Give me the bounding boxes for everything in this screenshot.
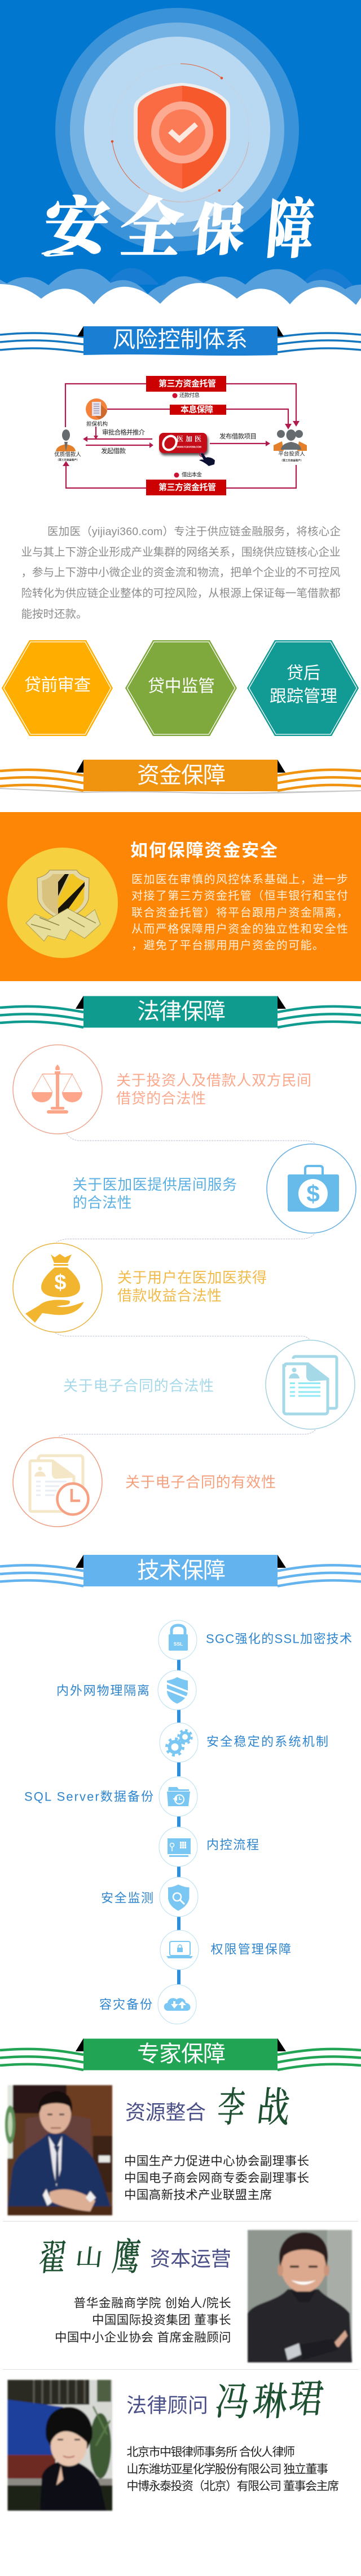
item: e-contract validity: 关于电子合同的有效性 — [125, 1474, 276, 1491]
icon: laptop lock — [166, 1941, 193, 1958]
investors — [274, 429, 307, 462]
heading: 法律保障 banner — [0, 996, 361, 1028]
logo: yijiayi — [159, 433, 208, 455]
timeline spine — [177, 1659, 180, 1984]
dashed connectors — [55, 1134, 315, 1436]
panel: pre-loan review hexagon: 贷前审查 — [24, 676, 91, 694]
text block: intro paragraph: 业与其上下游企业形成产业集群的网络关系，围绕供应链核心企业 — [21, 546, 341, 558]
item: user earnings legality: 关于用户在医加医获得 — [117, 1269, 267, 1286]
heading: 专家保障 banner — [0, 2038, 361, 2070]
name: 琳 — [251, 2381, 289, 2424]
chart: risk control flow diagram — [54, 376, 307, 495]
text block: intro paragraph: 医加医（yijiayi360.com）专注于供应链金融服务，将核心企 — [47, 525, 341, 538]
icon: documents — [284, 1356, 337, 1414]
logo: yijiayi: 医加医 — [177, 434, 201, 443]
photo: portrait — [5, 2085, 112, 2215]
item: SSL encryption — [159, 1620, 352, 1660]
title — [39, 193, 316, 266]
text block: 医加医在审慎的风控体系基础上，进一步 — [131, 873, 348, 886]
bio: 中博永泰投资（北京）有限公司 董事会主席 — [126, 2480, 339, 2493]
panel: in-loan supervision hexagon: 贷中监管 — [148, 677, 215, 695]
icon: lock: SSL — [174, 1641, 183, 1647]
title: 全 — [116, 193, 187, 265]
item: e-contract validity — [13, 1438, 276, 1527]
text block: intro paragraph — [21, 525, 341, 620]
bio: 普华金融商学院 创始人/院长 — [74, 2296, 231, 2310]
item: permissions — [160, 1930, 291, 1970]
icon: shield search — [168, 1885, 190, 1911]
item: network isolation: 内外网物理隔离 — [56, 1684, 149, 1697]
expert: Feng Linjun — [8, 2378, 339, 2511]
icon: briefcase — [288, 1166, 339, 1212]
arrow heads — [63, 421, 300, 466]
name: 山 — [74, 2245, 104, 2270]
item: user earnings legality — [13, 1243, 267, 1332]
name — [215, 2086, 292, 2131]
investors: 平台投资人 — [278, 451, 305, 458]
item: intermediary service legality — [73, 1144, 356, 1233]
panel: hero header — [0, 0, 361, 316]
title: 安 — [39, 193, 118, 261]
text block: intro paragraph: ，参与上下游中小微企业的资金流和物流，把单个企业的不可控风 — [21, 566, 341, 579]
text block: ，避免了平台挪用用户资金的可能。 — [131, 939, 324, 952]
panel: post-loan tracking hexagon: 贷后 — [287, 664, 320, 683]
item: intermediary service legality: 的合法性 — [73, 1194, 132, 1211]
item: internal control: 内控流程 — [206, 1838, 259, 1852]
icon: document with clock — [30, 1456, 88, 1515]
role: 法律顾问 — [126, 2394, 208, 2417]
photo: portrait — [248, 2230, 352, 2362]
icon: guarantee institution — [86, 398, 107, 420]
panel: post-loan tracking hexagon — [247, 640, 359, 736]
item: SSL encryption: SGC强化的SSL加密技术 — [206, 1632, 352, 1646]
photo: portrait — [8, 2380, 112, 2511]
icon: safe — [168, 1838, 191, 1857]
bio: 北京市中银律师事务所 合伙人律师 — [126, 2446, 295, 2459]
text block: intro paragraph: 能按时还款。 — [21, 608, 87, 620]
bio: 山东潍坊亚星化学股份有限公司 独立董事 — [126, 2463, 328, 2476]
text block: 对接了第三方资金托管（恒丰银行和宝付 — [131, 889, 348, 902]
icon: lock — [169, 1625, 188, 1651]
item: stable system — [160, 1723, 328, 1762]
clouds — [0, 268, 361, 316]
third-party custody box top: 第三方资金托管 — [159, 379, 216, 389]
role: 资本运营 — [150, 2247, 231, 2270]
panel: post-loan tracking hexagon: 跟踪管理 — [270, 688, 337, 706]
title: 障 — [263, 194, 316, 266]
panel: in-loan supervision hexagon — [125, 640, 237, 736]
heading: 专家保障 banner: 专家保障 — [137, 2042, 226, 2067]
icon: gears — [167, 1730, 192, 1755]
label: approval: 审批合格并推介 — [102, 428, 146, 436]
orbit arcs with dots — [111, 64, 249, 202]
label: initiate loan: 发起借款 — [101, 447, 126, 455]
item: SQL backup — [24, 1777, 197, 1816]
text block: 联合资金托管）将平台跟用户资金隔离， — [131, 906, 348, 919]
text block — [131, 873, 348, 952]
bio — [124, 2154, 309, 2202]
panel: pre-loan review hexagon — [2, 640, 113, 736]
name: 珺 — [287, 2378, 325, 2421]
name: 鹰 — [110, 2237, 143, 2278]
heading: 技术保障 banner: 技术保障 — [137, 1558, 226, 1583]
name — [213, 2378, 325, 2424]
bio: 中国中小企业协会 首席金融顾问 — [55, 2331, 231, 2344]
bio: 中国国际投资集团 董事长 — [92, 2313, 231, 2327]
item: intermediary service legality: 关于医加医提供居间服务 — [73, 1176, 237, 1193]
heading: 风险控制体系 banner: 风险控制体系 — [113, 327, 248, 352]
investors: （第三方资金账户） — [280, 459, 303, 462]
item: investor borrower legality: 关于投资人及借款人双方民间 — [116, 1072, 311, 1089]
bio: 中国高新技术产业联盟主席 — [124, 2188, 272, 2202]
title: 保 — [190, 199, 248, 261]
icon: briefcase: $ — [306, 1180, 320, 1207]
icon: orange shield with check — [134, 83, 230, 192]
label: lend principal — [174, 471, 202, 478]
icon: shield and money — [7, 848, 118, 958]
item: disaster backup — [99, 1985, 196, 2024]
name: 战 — [255, 2086, 292, 2131]
label: guarantee: 担保机构 — [86, 420, 108, 427]
item: investor borrower legality — [13, 1045, 311, 1134]
heading: 如何保障资金安全 — [130, 841, 278, 860]
item: permissions: 权限管理保障 — [211, 1942, 291, 1957]
item: investor borrower legality: 借贷的合法性 — [116, 1090, 206, 1107]
borrower: （第三方资金账户） — [56, 458, 79, 462]
name: 翟 — [37, 2239, 68, 2278]
label: publish project: 发布借款项目 — [219, 432, 257, 440]
item: e-contract legality — [63, 1340, 355, 1429]
heading: 技术保障 banner — [0, 1555, 361, 1586]
concentric circles — [55, 8, 299, 251]
bio: 中国电子商会网商专委会副理事长 — [124, 2171, 309, 2185]
item: stable system: 安全稳定的系统机制 — [206, 1735, 328, 1749]
bio — [126, 2446, 339, 2493]
heading: 法律保障 banner: 法律保障 — [137, 999, 226, 1024]
item: network isolation — [56, 1670, 196, 1710]
text block: intro paragraph: 险转化为供应链企业整体的可控风险，从根源上保证每一笔借款都 — [21, 587, 341, 600]
heading: 风险控制体系 banner — [0, 326, 361, 356]
heading: 资金保障 banner: 资金保障 — [137, 763, 226, 788]
expert: Li Zhan — [5, 2085, 309, 2215]
icon: scales — [32, 1065, 82, 1114]
icon: money bag in hand — [25, 1254, 84, 1323]
label: repayment — [173, 392, 200, 399]
name: 冯 — [213, 2381, 252, 2424]
flow lines — [65, 384, 296, 488]
expert: Zhai Shanying — [37, 2230, 352, 2362]
logo: yijiayi: WWW.YIJIAYI360.COM — [177, 445, 201, 449]
item: security monitoring — [101, 1877, 198, 1917]
item: e-contract legality: 关于电子合同的合法性 — [63, 1377, 214, 1394]
item: SQL backup: SQL Server数据备份 — [24, 1790, 153, 1803]
label: repayment: 还款付息 — [179, 392, 200, 399]
item: security monitoring: 安全监测 — [101, 1891, 153, 1905]
item: internal control — [159, 1827, 259, 1866]
icon: striped shield — [165, 1677, 190, 1704]
principal and interest box — [170, 405, 226, 415]
borrower — [54, 429, 81, 462]
item: disaster backup: 容灾备份 — [99, 1997, 152, 2012]
third-party custody box bottom — [146, 480, 226, 495]
heading: 资金保障 banner — [0, 760, 361, 794]
borrower: 优质借款人 — [54, 451, 81, 458]
third-party custody box bottom: 第三方资金托管 — [159, 482, 216, 493]
principal and interest box: 本息保障 — [180, 405, 213, 415]
third-party custody box top — [146, 376, 226, 392]
panel: capital safety — [0, 812, 361, 981]
bio — [55, 2296, 231, 2344]
text block: 从而严格保障用户资金的独立性和安全性 — [131, 923, 348, 935]
bio: 中国生产力促进中心协会副理事长 — [124, 2154, 309, 2168]
icon: cloud — [164, 1998, 191, 2011]
label: lend principal: 借出本金 — [182, 471, 202, 478]
name: 李 — [215, 2086, 247, 2131]
name — [37, 2237, 143, 2278]
item: user earnings legality: 借款收益合法性 — [117, 1287, 222, 1304]
role: 资源整合 — [125, 2101, 206, 2123]
icon: pointer hand — [199, 452, 215, 466]
icon: money bag in hand: $ — [54, 1271, 67, 1294]
icon: folder — [167, 1787, 190, 1806]
